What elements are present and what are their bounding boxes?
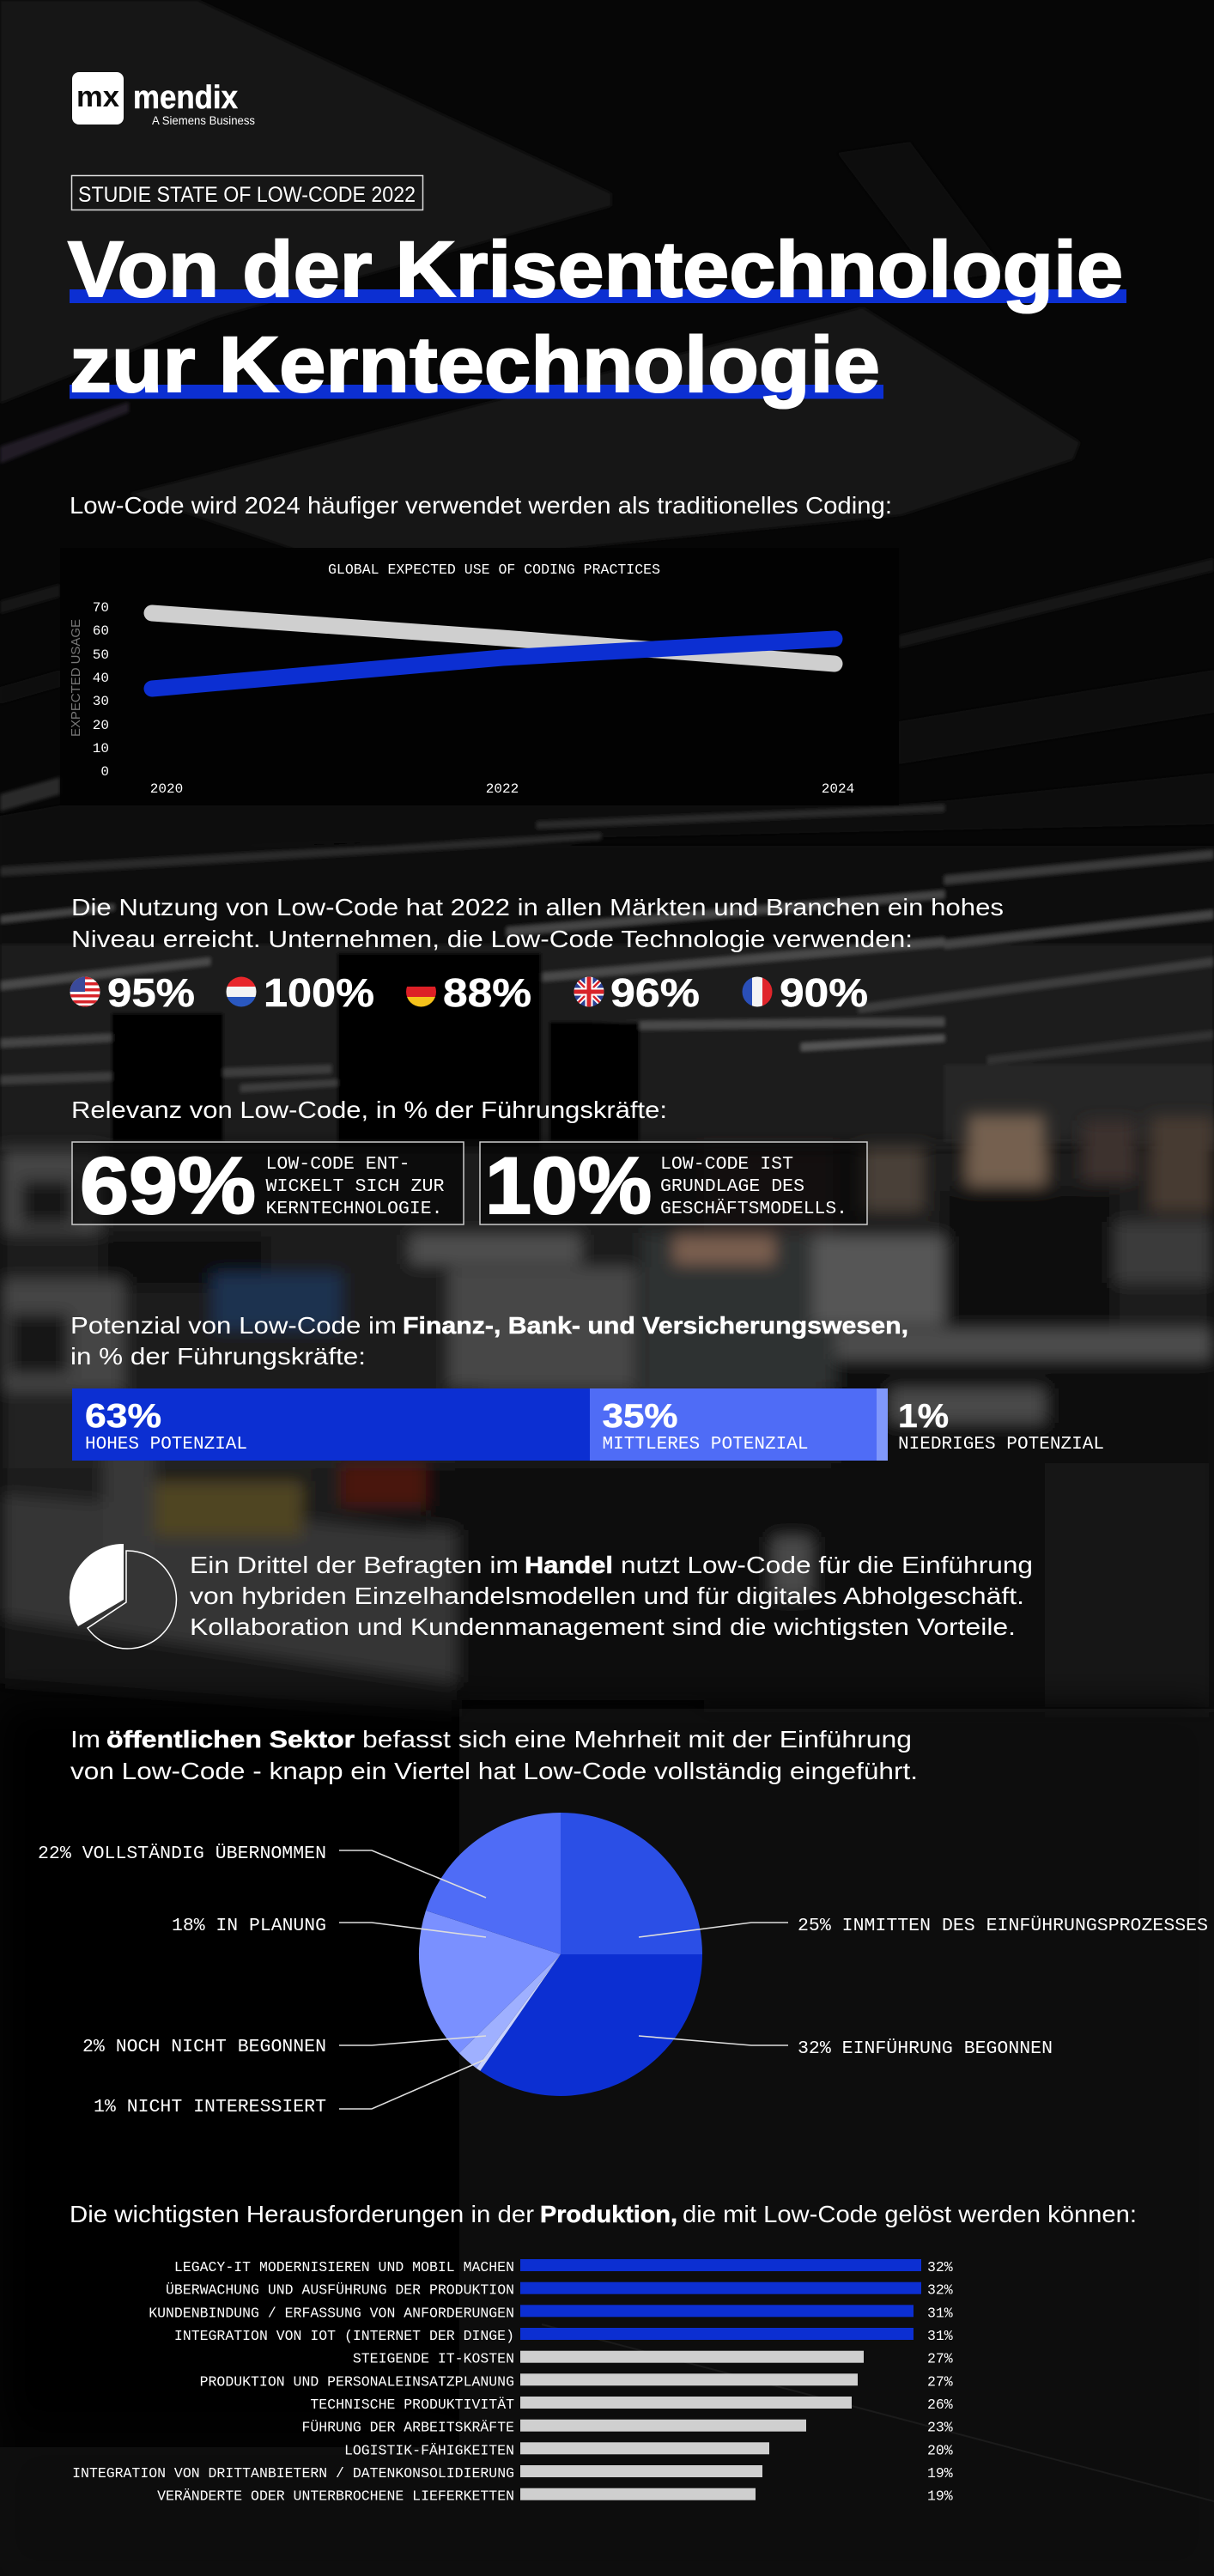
series: traditional coding [152,613,835,664]
series: low-code [152,639,835,689]
heading: public sector: von Low-Code - knapp ein Viertel hat Low-Code vollständig eingeführt. [70,1758,918,1784]
logo: mendix [72,72,255,127]
heading: finance sector: Potenzial von Low-Code im [70,1312,397,1339]
slice labels: 1% NICHT INTERESSIERT [94,2097,326,2117]
values: 23% [927,2420,953,2436]
logo: mendix: A Siemens Business [152,113,255,127]
callout: 10 percent: 10% [485,1140,652,1230]
values: 19% [927,2465,953,2482]
category labels: INTEGRATION VON DRITTANBIETERN / DATENKONSOLIDIERUNG [72,2465,514,2482]
category labels: LEGACY-IT MODERNISIEREN UND MOBIL MACHEN [174,2259,514,2275]
logo: mendix: mendix [133,80,238,116]
x axis labels: 2022 [486,781,519,797]
icon: Netherlands flag [226,976,257,1008]
slice labels: 25% INMITTEN DES EINFÜHRUNGSPROZESSES [798,1915,1208,1936]
y axis ticks: 30 [93,694,109,709]
icon: US flag [70,976,100,1008]
values: 27% [927,2351,953,2367]
y axis ticks: 0 [100,764,109,780]
icon: France flag [742,976,774,1007]
category labels: KUNDENBINDUNG / ERFASSUNG VON ANFORDERUNGEN [149,2305,514,2321]
slice labels: 22% VOLLSTÄNDIG ÜBERNOMMEN [38,1843,326,1864]
x axis labels: 2020 [150,781,183,797]
slice labels: 18% IN PLANUNG [172,1916,326,1936]
x axis labels [150,781,854,797]
heading: manufacturing: Die wichtigsten Herausforderungen in der [70,2201,534,2227]
y axis ticks: 40 [93,671,109,686]
heading: manufacturing [70,2201,1137,2227]
values [927,2259,953,2505]
callout: 10 percent: GESCHÄFTSMODELLS. [660,1200,847,1219]
slice labels [38,1843,1208,2117]
y axis ticks: 20 [93,718,109,733]
text: retail [190,1552,1033,1640]
segment label: low: 1% [898,1398,949,1435]
heading: relevance: Relevanz von Low-Code, in % der Führungskräfte: [71,1097,667,1123]
segment label: medium [603,1398,809,1455]
text: retail: Handel [525,1552,613,1578]
icon: Germany flag [406,987,436,1006]
line chart: global expected use of coding practices [60,548,899,805]
values: 26% [927,2397,953,2413]
title: zur Kerntechnologie [70,321,880,409]
values: 20% [927,2442,953,2458]
text: usage across markets: Die Nutzung von Low-Code hat 2022 in allen Märkten und Branchen ein hohes [71,894,1004,920]
value: UK: 96% [610,970,700,1015]
text: retail: von hybriden Einzelhandelsmodellen und für digitales Abholgeschäft. [190,1583,1024,1609]
callout: 10 percent: LOW-CODE IST [660,1155,793,1175]
y axis ticks: 50 [93,647,109,663]
slice labels: 2% NOCH NICHT BEGONNEN [82,2037,326,2057]
heading: finance sector: in % der Führungskräfte: [70,1343,366,1370]
heading: manufacturing: die mit Low-Code gelöst werden können: [683,2201,1137,2227]
callout: 69 percent: WICKELT SICH ZUR [266,1177,445,1197]
callout: 10 percent: GRUNDLAGE DES [660,1177,804,1197]
segment label: low: NIEDRIGES POTENZIAL [898,1435,1104,1455]
segment label: medium: 35% [603,1398,678,1435]
callout: 69 percent: LOW-CODE ENT- [266,1155,410,1175]
stacked bar: potential [72,1388,1104,1461]
heading: public sector: Im [70,1726,100,1753]
logo: mendix: mx [76,81,119,113]
chart title: GLOBAL EXPECTED USE OF CODING PRACTICES [328,562,660,578]
text: retail: Kollaboration und Kundenmanagement sind die wichtigsten Vorteile. [190,1613,1016,1640]
bar chart: manufacturing challenges [72,2259,953,2505]
segment label: high [85,1398,247,1455]
category labels: INTEGRATION VON IOT (INTERNET DER DINGE) [174,2328,514,2344]
value: US: 95% [107,970,195,1015]
callout: 69 percent [72,1140,464,1230]
heading: public sector: befasst sich eine Mehrheit mit der Einführung [362,1726,912,1753]
title: Von der Krisentechnologie [68,226,1123,313]
values: 27% [927,2373,953,2390]
icon: one third pie [70,1544,176,1649]
y axis ticks: 60 [93,623,109,639]
category labels: LOGISTIK-FÄHIGKEITEN [344,2442,514,2458]
y axis ticks: 70 [93,600,109,616]
heading: finance sector: Finanz-, Bank- und Versicherungswesen, [403,1312,908,1339]
y axis ticks [93,600,109,780]
value: Netherlands: 100% [264,970,374,1015]
category labels: TECHNISCHE PRODUKTIVITÄT [310,2397,514,2413]
heading: manufacturing: Produktion, [540,2201,677,2227]
category labels: FÜHRUNG DER ARBEITSKRÄFTE [301,2420,514,2436]
value: Germany: 88% [443,970,531,1015]
text: usage across markets: Niveau erreicht. Unternehmen, die Low-Code Technologie verwenden: [71,926,913,952]
callout: 10 percent [480,1140,867,1230]
category labels: STEIGENDE IT-KOSTEN [353,2351,514,2367]
values: 19% [927,2488,953,2505]
slice labels: 32% EINFÜHRUNG BEGONNEN [798,2038,1053,2059]
values: 31% [927,2328,953,2344]
badge: study label [72,175,422,210]
callout: 69 percent: KERNTECHNOLOGIE. [266,1200,443,1219]
values: 31% [927,2305,953,2321]
category labels: VERÄNDERTE ODER UNTERBROCHENE LIEFERKETTEN [157,2488,514,2505]
y axis label: EXPECTED USAGE [69,619,83,737]
badge: study label: STUDIE STATE OF LOW-CODE 2022 [78,183,416,207]
title [68,226,1126,409]
value: France: 90% [780,970,868,1015]
category labels: ÜBERWACHUNG UND AUSFÜHRUNG DER PRODUKTION [166,2282,514,2299]
category labels [72,2259,514,2505]
y axis ticks: 10 [93,741,109,756]
stats: countries [70,977,867,1007]
x axis labels: 2024 [822,781,854,797]
values: 32% [927,2282,953,2299]
text: usage across markets [71,894,1004,952]
segment label: medium: MITTLERES POTENZIAL [603,1435,809,1455]
text: retail: nutzt Low-Code für die Einführung [621,1552,1033,1578]
bars [520,2259,921,2500]
segment label: low [898,1398,1104,1455]
callout: 69 percent: 69% [80,1140,256,1230]
heading: public sector [70,1726,918,1784]
pie chart: public sector adoption [38,1813,1208,2117]
heading: low-code vs coding: Low-Code wird 2024 häufiger verwendet werden als traditionelles Coding: [70,492,892,519]
heading: public sector: öffentlichen Sektor [106,1726,355,1753]
text: retail: Ein Drittel der Befragten im [190,1552,519,1578]
leader lines [339,1850,788,2109]
segment label: high: 63% [85,1398,161,1435]
category labels: PRODUKTION UND PERSONALEINSATZPLANUNG [200,2373,514,2390]
segment label: high: HOHES POTENZIAL [85,1435,247,1455]
heading: finance sector [70,1312,908,1370]
icon: UK flag [574,976,604,1007]
values: 32% [927,2259,953,2275]
